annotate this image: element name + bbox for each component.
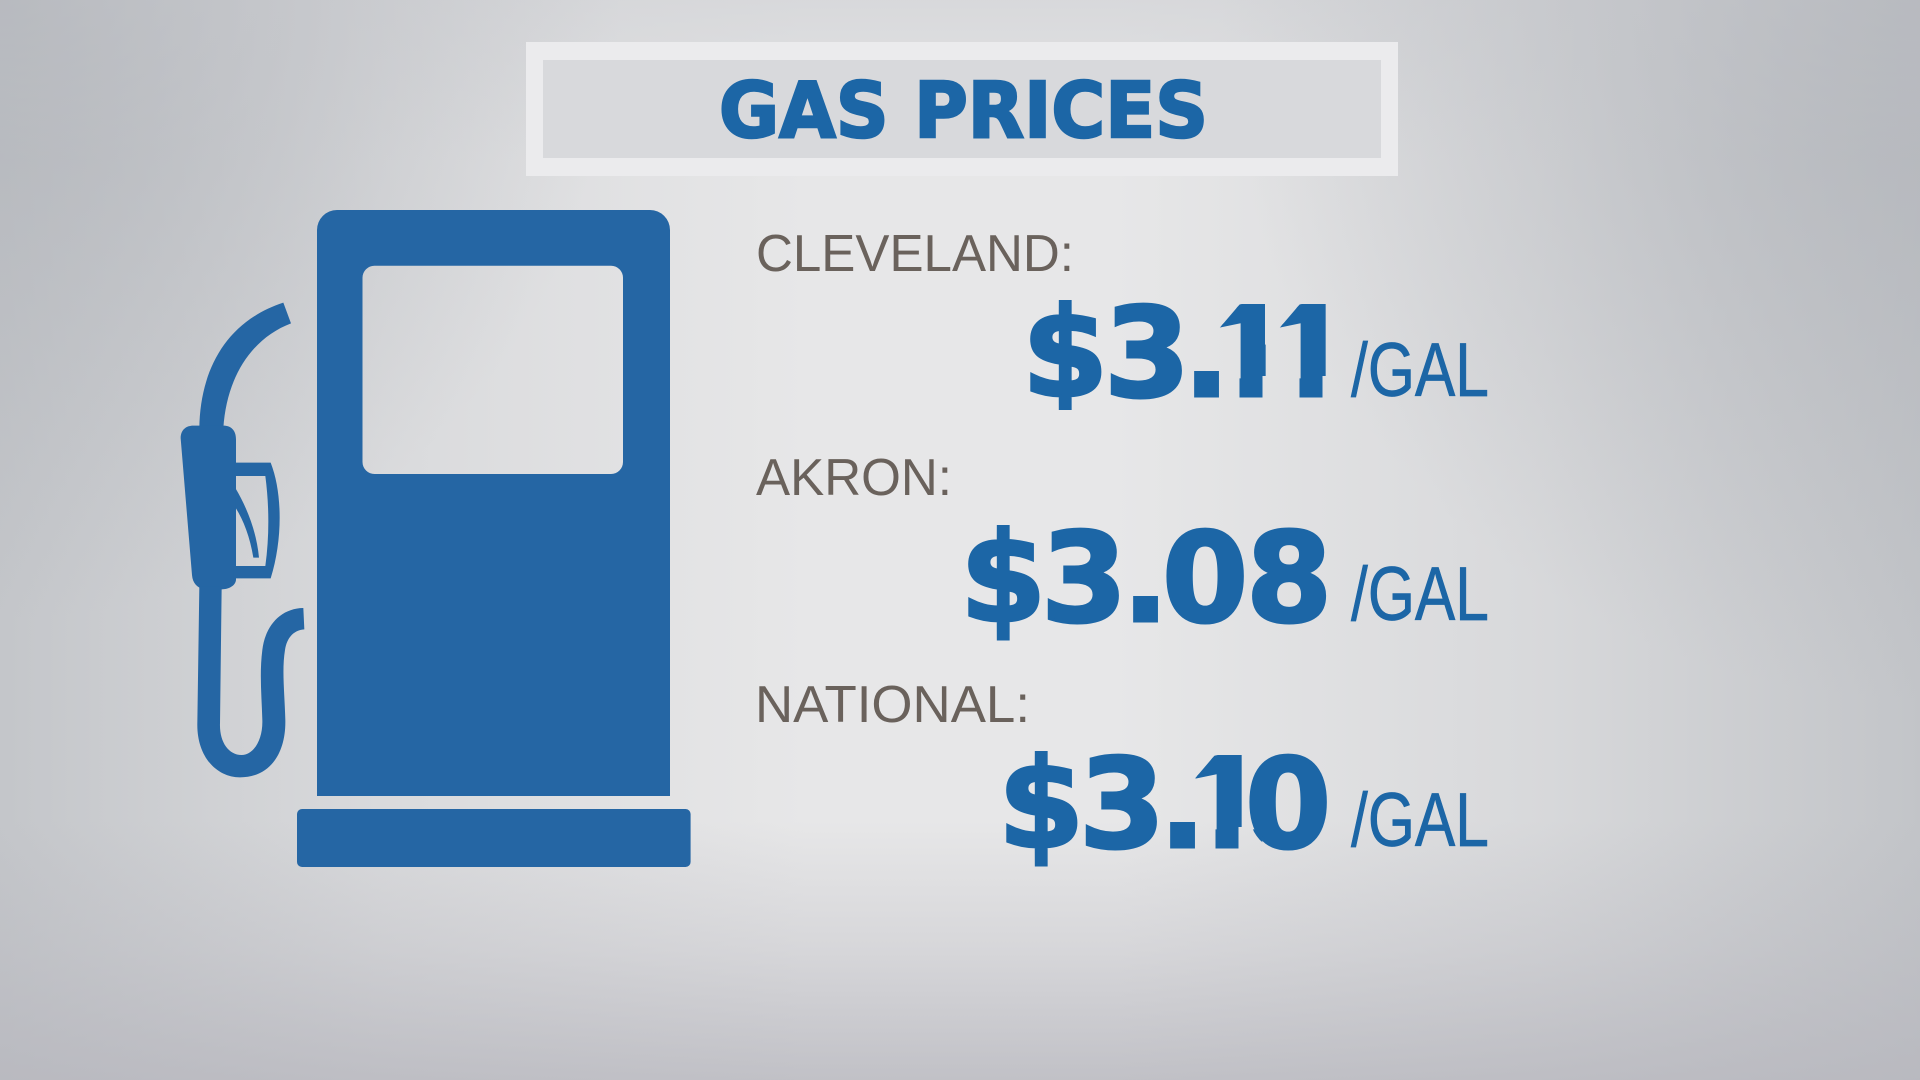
unit: /GAL bbox=[1351, 328, 1489, 413]
price row: Cleveland bbox=[758, 234, 1488, 410]
label: CLEVELAND: bbox=[756, 225, 1074, 283]
price: $3.10 bbox=[998, 733, 1331, 877]
title panel bbox=[543, 60, 1381, 158]
price row: Akron bbox=[756, 449, 1489, 651]
label: AKRON: bbox=[756, 449, 952, 507]
label: NATIONAL: bbox=[755, 676, 1030, 734]
fuel nozzle and hose bbox=[181, 303, 304, 777]
price: $3.11 bbox=[1022, 282, 1353, 426]
pump body with window bbox=[317, 210, 670, 796]
title: GAS PRICES bbox=[719, 67, 1208, 156]
pump base bbox=[297, 809, 691, 867]
title box bbox=[526, 42, 1398, 176]
price: $3.08 bbox=[960, 507, 1332, 651]
unit: /GAL bbox=[1351, 552, 1489, 637]
icon: gas pump bbox=[181, 210, 691, 867]
title frame bbox=[526, 42, 1398, 176]
unit: /GAL bbox=[1351, 778, 1489, 863]
price row: National bbox=[759, 686, 1488, 866]
